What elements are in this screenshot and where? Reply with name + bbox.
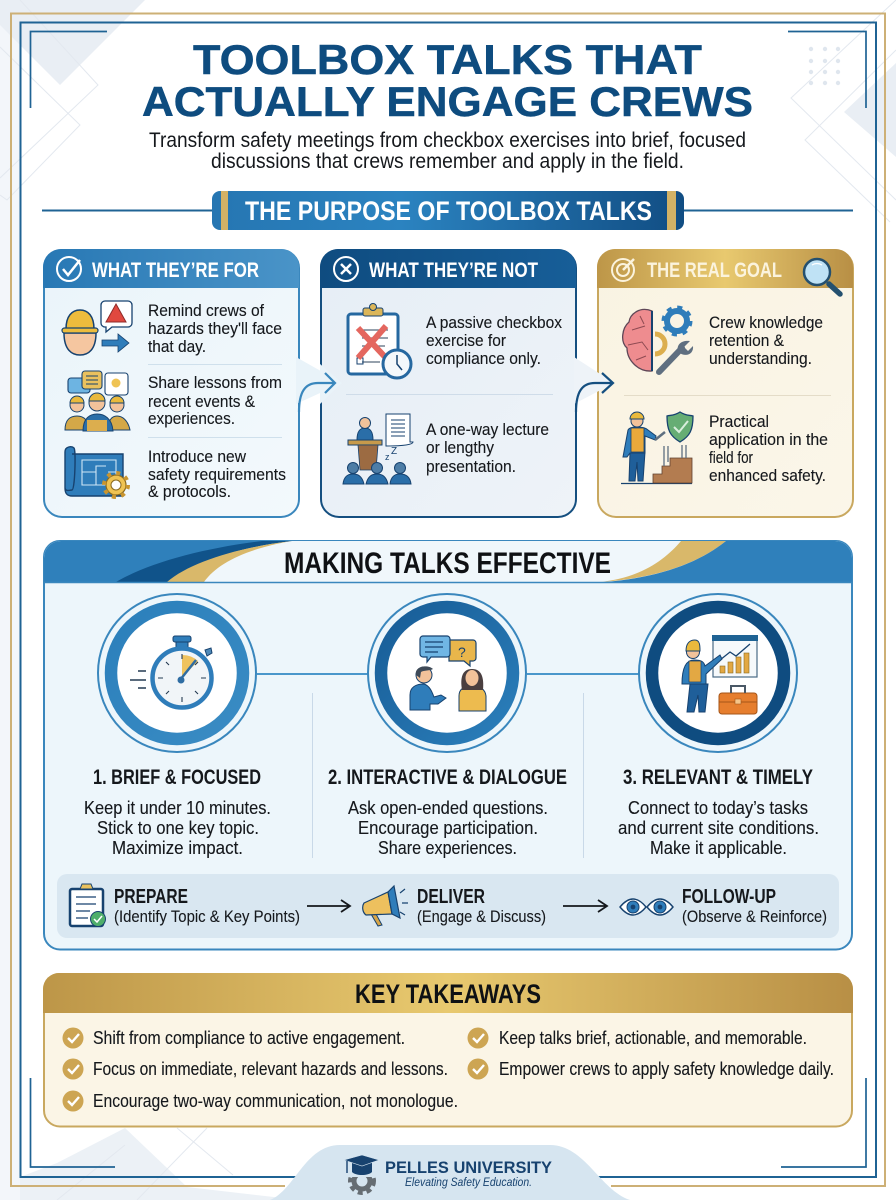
text: one-way lecture: or lengthy — [426, 438, 494, 457]
title — [142, 36, 753, 125]
icon: crossed-out clipboard and clock — [348, 304, 411, 378]
icon: megaphone — [363, 886, 408, 926]
text: crew knowledge: understanding. — [709, 349, 812, 368]
arrow: not to goal — [574, 357, 614, 412]
icon: graduation cap and gear — [344, 1155, 380, 1193]
column: brief and focused: Maximize impact. — [112, 838, 243, 858]
takeaway list: Keep talks brief, actionable, and memorable. — [499, 1028, 807, 1048]
footer: pelles university logo: PELLES UNIVERSITY — [385, 1158, 553, 1177]
column: brief and focused — [84, 766, 271, 858]
panel: what they're not — [320, 249, 576, 517]
column: interactive and dialogue: 2. INTERACTIVE & DIALOGUE — [328, 766, 567, 789]
text: remind crews: hazards they'll face — [148, 319, 282, 338]
text: remind crews — [148, 301, 282, 356]
column: relevant and timely — [618, 766, 819, 858]
header: making talks effective: MAKING TALKS EFFECTIVE — [284, 547, 611, 580]
icon: one-way lecture — [343, 414, 413, 484]
arrow: prepare to deliver — [307, 900, 350, 912]
text: crew knowledge: Crew knowledge — [709, 313, 823, 332]
text: one-way lecture: presentation. — [426, 457, 516, 476]
column: relevant and timely: Make it applicable. — [650, 838, 787, 858]
text: introduce requirements: & protocols. — [148, 482, 231, 501]
icon: checklist clipboard — [70, 884, 106, 926]
subtitle: discussions that crews remember and apply in the field. — [211, 150, 684, 173]
process flow bar — [57, 874, 839, 938]
panel: making talks effective — [44, 541, 852, 950]
takeaway list — [62, 1028, 834, 1112]
text: practical application — [709, 412, 828, 485]
subtitle: Transform safety meetings from checkbox exercises into brief, focused — [149, 129, 746, 152]
panel: what they're for — [43, 249, 299, 517]
text: share lessons — [148, 373, 282, 428]
column: relevant and timely: and current site conditions. — [618, 818, 819, 838]
text: remind crews: that day. — [148, 337, 206, 356]
header: what they're not: WHAT THEY’RE NOT — [369, 259, 538, 282]
arrow: deliver to follow-up — [563, 900, 607, 912]
step: prepare: PREPARE — [114, 886, 188, 908]
text: passive checkbox: compliance only. — [426, 349, 541, 368]
text: introduce requirements: safety requirements — [148, 465, 286, 484]
takeaway list: Shift from compliance to active engagement. — [93, 1028, 405, 1048]
icon: worker, shield and steps — [621, 412, 693, 484]
column: brief and focused: Stick to one key topic. — [97, 818, 259, 838]
takeaway list: Focus on immediate, relevant hazards and lessons. — [93, 1059, 448, 1079]
section banner: the purpose of toolbox talks — [42, 191, 853, 230]
column: interactive and dialogue: Encourage participation. — [358, 818, 538, 838]
icon: crew sharing lessons — [65, 371, 130, 431]
text: introduce requirements — [148, 447, 286, 501]
text: practical application: application in the — [709, 430, 828, 449]
text: one-way lecture: A one-way lecture — [426, 420, 549, 439]
text: share lessons: Share lessons from — [148, 373, 282, 392]
text: share lessons: recent events & — [148, 392, 256, 411]
column: interactive and dialogue: Ask open-ended questions. — [348, 798, 548, 818]
subtitle — [149, 129, 746, 173]
text: crew knowledge — [709, 313, 823, 368]
text: practical application: enhanced safety. — [709, 466, 826, 485]
text: passive checkbox: exercise for — [426, 331, 506, 350]
step: prepare — [114, 886, 300, 926]
step: deliver: (Engage & Discuss) — [417, 907, 546, 926]
text: introduce requirements: Introduce new — [148, 447, 247, 466]
header: the real goal: THE REAL GOAL — [647, 259, 782, 282]
icon: one-way lecture: z — [385, 452, 390, 462]
step: follow-up: FOLLOW-UP — [682, 886, 776, 908]
step: deliver — [417, 886, 546, 926]
header: key takeaways — [43, 973, 853, 1013]
icon: worker with hazard alert — [62, 301, 132, 355]
column: relevant and timely: Connect to today’s tasks — [628, 798, 808, 818]
icon: blueprint and gear — [65, 447, 128, 497]
section banner: the purpose of toolbox talks: THE PURPOSE OF TOOLBOX TALKS — [245, 196, 652, 226]
header: what they're for — [43, 249, 299, 288]
icon: eyes — [620, 899, 673, 915]
footer: pelles university logo: Elevating Safety Education. — [405, 1175, 532, 1189]
text: remind crews: Remind crews of — [148, 301, 264, 320]
takeaway list: Encourage two-way communication, not monologue. — [93, 1091, 458, 1111]
header: making talks effective — [44, 541, 852, 582]
panel: the real goal — [597, 249, 853, 517]
circle icon: stopwatch — [98, 594, 256, 752]
header: what they're for: WHAT THEY’RE FOR — [92, 259, 259, 282]
takeaway list: Empower crews to apply safety knowledge daily. — [499, 1059, 834, 1079]
panel: key takeaways — [43, 973, 853, 1126]
text: share lessons: experiences. — [148, 409, 235, 428]
circle icon: dialogue: ? — [458, 644, 466, 660]
text: passive checkbox — [426, 313, 562, 368]
icon: brain, gears and wrench — [623, 308, 693, 372]
step: prepare: (Identify Topic & Key Points) — [114, 907, 300, 926]
column: interactive and dialogue — [328, 766, 567, 858]
header: what they're not — [320, 249, 576, 288]
text: passive checkbox: A passive checkbox — [426, 313, 562, 332]
step: follow-up — [682, 886, 827, 926]
text: practical application: field for — [709, 448, 753, 467]
circle icon: worker presenting chart — [639, 594, 797, 752]
text: one-way lecture — [426, 420, 549, 476]
column: interactive and dialogue: Share experiences. — [378, 838, 517, 858]
icon: one-way lecture: Z — [391, 446, 397, 457]
step: deliver: DELIVER — [417, 886, 485, 908]
header: the real goal — [597, 249, 853, 294]
arrow: for to not — [296, 357, 342, 412]
title: ACTUALLY ENGAGE CREWS — [142, 78, 753, 125]
title: TOOLBOX TALKS THAT — [193, 36, 702, 83]
text: practical application: Practical — [709, 412, 769, 431]
column: relevant and timely: 3. RELEVANT & TIMELY — [623, 766, 813, 789]
column: brief and focused: 1. BRIEF & FOCUSED — [93, 766, 261, 789]
header: key takeaways: KEY TAKEAWAYS — [355, 979, 541, 1009]
circle icon: dialogue — [368, 594, 526, 752]
footer: pelles university logo — [270, 1145, 630, 1200]
column: brief and focused: Keep it under 10 minutes. — [84, 798, 271, 818]
step: follow-up: (Observe & Reinforce) — [682, 907, 827, 926]
text: crew knowledge: retention & — [709, 331, 785, 350]
